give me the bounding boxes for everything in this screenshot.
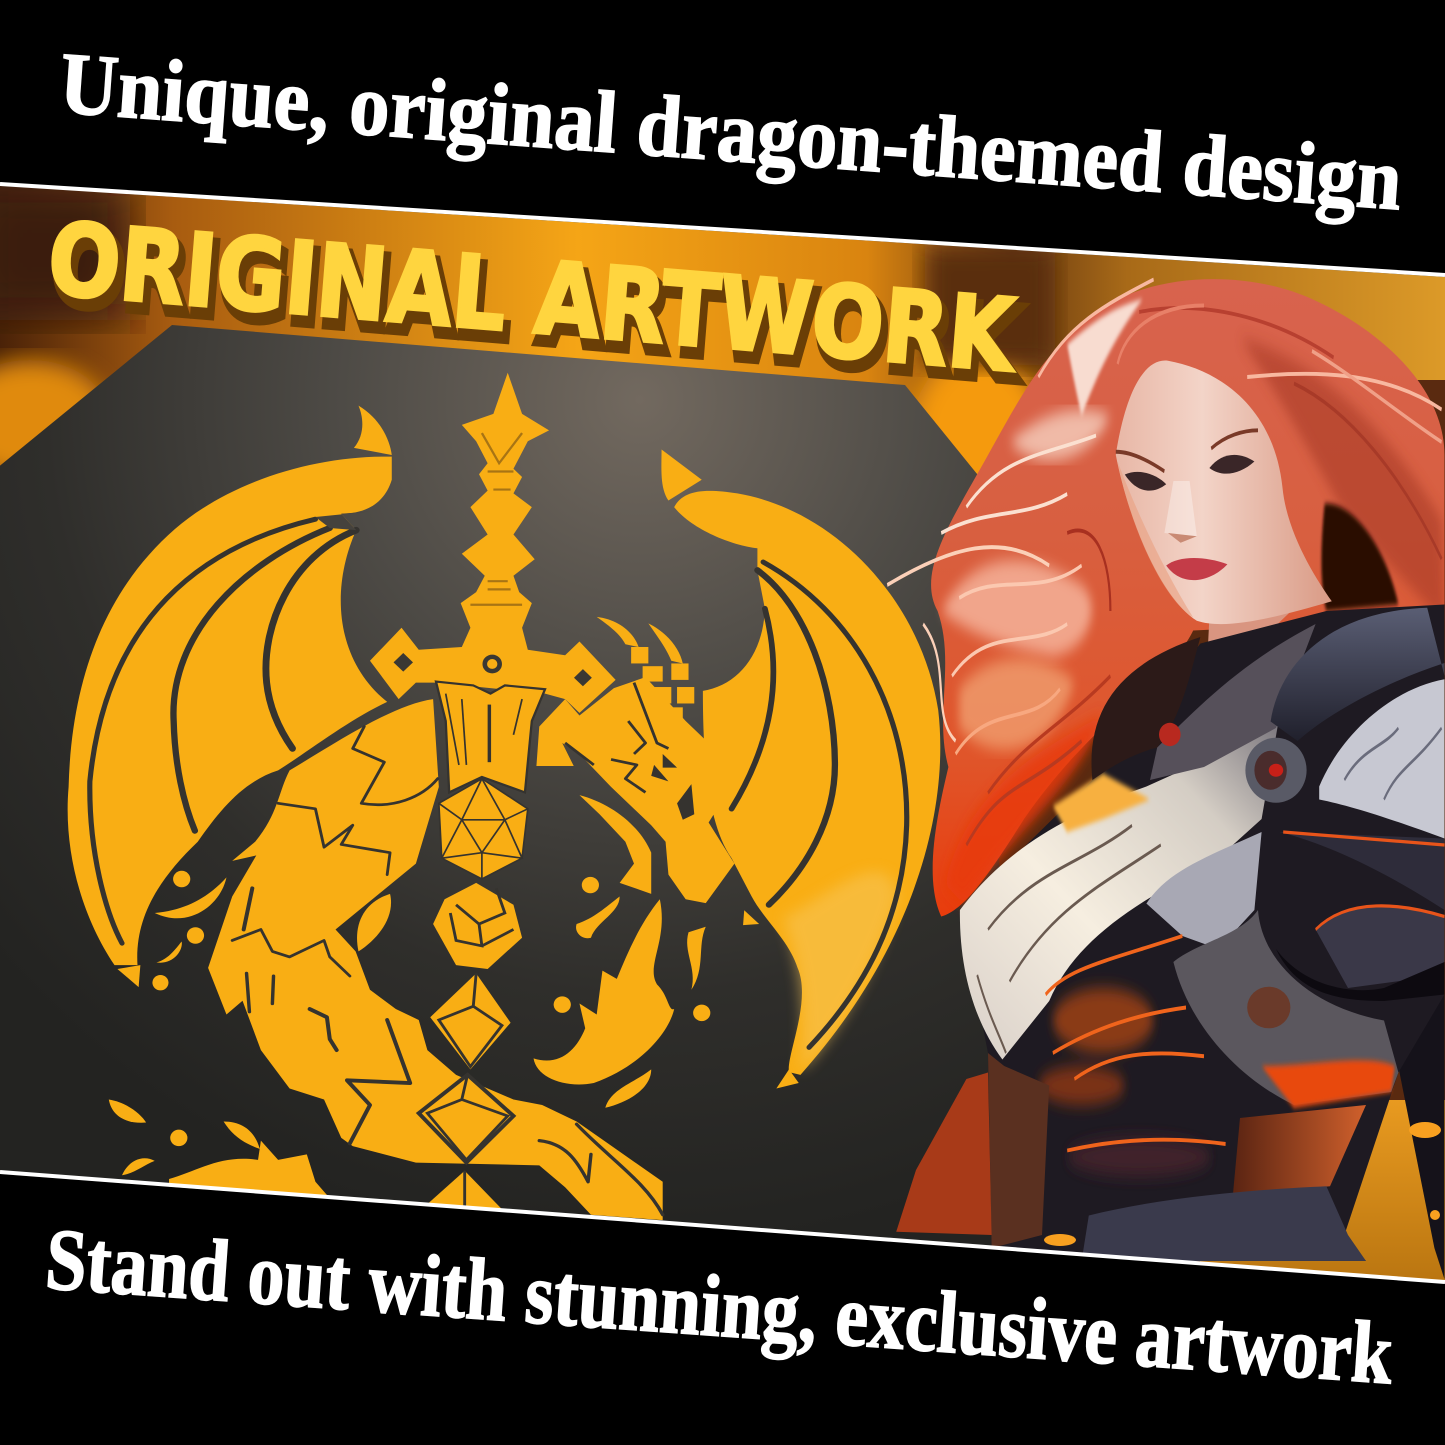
nose bbox=[1168, 533, 1197, 543]
silver shoulder plate bbox=[1319, 679, 1444, 839]
right pauldron bbox=[1271, 608, 1444, 741]
neck jewel bbox=[1159, 723, 1181, 746]
shoulder etching bbox=[1344, 728, 1442, 800]
armour base bbox=[960, 604, 1444, 1261]
layered pauldron bands bbox=[1276, 832, 1444, 1001]
gorget bbox=[1150, 624, 1316, 780]
dragon head and horns bbox=[536, 617, 759, 925]
chest filigree bbox=[977, 826, 1161, 1053]
dragon fire and embers bbox=[109, 871, 710, 1198]
fiery background bbox=[0, 170, 1445, 1290]
shoulder jewel bbox=[1245, 738, 1307, 803]
face bbox=[1116, 361, 1332, 624]
centre column bbox=[988, 1053, 1049, 1248]
right eye bbox=[1209, 455, 1254, 474]
dark leather panel bbox=[0, 325, 1010, 1300]
plate rivet bbox=[1247, 987, 1290, 1028]
orange ember lines bbox=[1046, 936, 1226, 1150]
hair strands bbox=[887, 280, 1442, 845]
dragon body and mane bbox=[208, 699, 663, 1220]
belt bbox=[1082, 1186, 1366, 1261]
left eye bbox=[1125, 472, 1166, 491]
eyebrows bbox=[1116, 430, 1258, 471]
title extrusion: ORIGINAL ARTWORK bbox=[48, 210, 1026, 404]
orange plate glow bbox=[1262, 1060, 1395, 1108]
left pauldron collar bbox=[1092, 637, 1200, 780]
left wing bbox=[68, 406, 392, 987]
waist glow bbox=[1233, 1105, 1366, 1196]
far arm bbox=[1399, 994, 1444, 1279]
image band bbox=[0, 170, 1445, 1300]
dragon and sword emblem bbox=[68, 373, 940, 1220]
title: Original Artwork bbox=[43, 200, 1026, 404]
neck bbox=[1208, 613, 1289, 642]
bottom white border of the band bbox=[0, 1172, 1445, 1282]
frayed cloth at hip bbox=[896, 1072, 992, 1235]
lips bbox=[1166, 558, 1227, 580]
silver chest ornament bbox=[1146, 832, 1262, 949]
steel side plate bbox=[1173, 910, 1398, 1105]
silver chest bbox=[960, 715, 1280, 1060]
warrior woman bbox=[887, 279, 1444, 1279]
flowing red hair bbox=[887, 279, 1444, 917]
right wing bbox=[661, 450, 940, 1089]
glowing fire collar bbox=[1053, 774, 1150, 832]
lower belly glow bbox=[1038, 988, 1211, 1176]
dice stack bbox=[419, 779, 528, 1209]
title face: ORIGINAL ARTWORK bbox=[44, 200, 1021, 395]
sword hilt and guard bbox=[370, 373, 616, 713]
top white border of the band bbox=[0, 184, 1445, 275]
sword blade bbox=[436, 682, 545, 792]
embers bbox=[1044, 1122, 1441, 1246]
